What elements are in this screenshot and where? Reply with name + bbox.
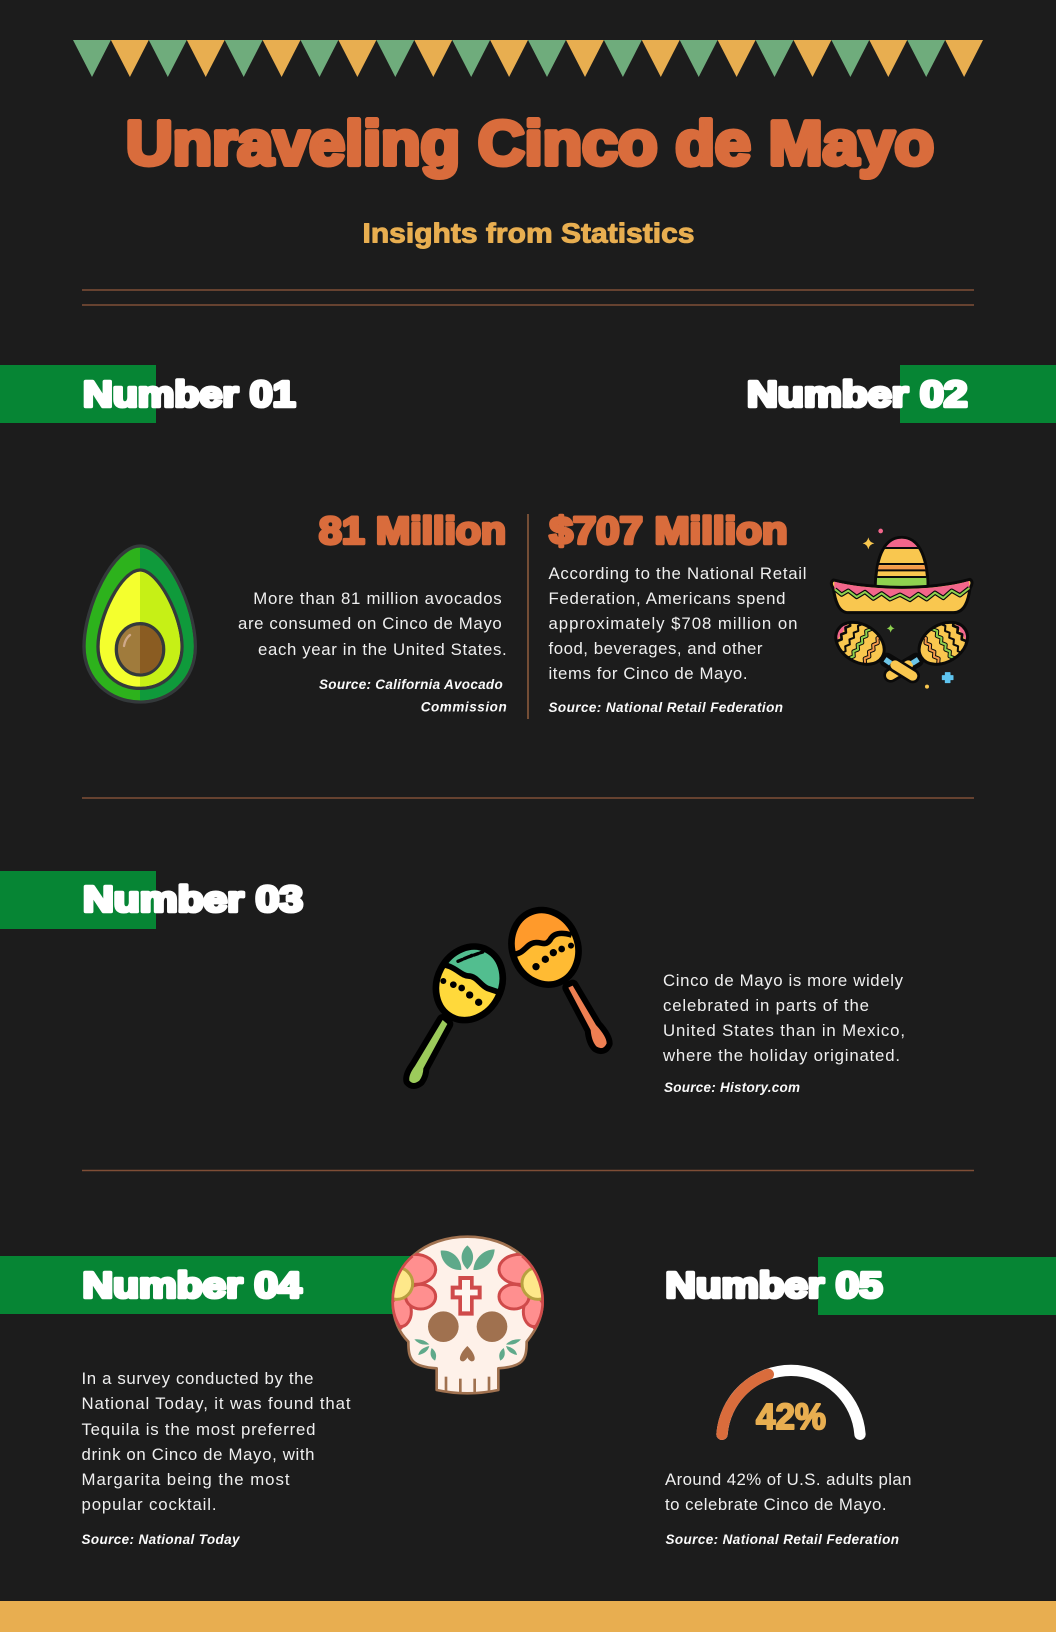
icon: avocado: [84, 546, 195, 702]
body text 05: [665, 1470, 912, 1514]
body text 04: popular cocktail.: [82, 1495, 216, 1514]
icon: sugar skull: [381, 1237, 554, 1393]
heading: number 03: Number 03: [83, 878, 303, 920]
footer bar: [0, 1601, 1056, 1632]
body text 02: food, beverages, and other: [548, 639, 763, 658]
title: Unraveling Cinco de Mayo: [126, 110, 934, 178]
center divider: [527, 514, 529, 719]
left maraca: [409, 927, 520, 1083]
flowers: [394, 1253, 542, 1328]
body text 05: Around 42% of U.S. adults plan: [665, 1470, 912, 1489]
nose: [460, 1346, 475, 1361]
stat: 81 million: 81 Million: [319, 510, 506, 552]
green bar 03: [0, 871, 156, 929]
section: number 04: [0, 1237, 554, 1547]
body text 01: [238, 589, 507, 659]
body text 04: drink on Cinco de Mayo, with: [82, 1445, 314, 1464]
sombrero: [831, 537, 972, 613]
body text 02: Federation, Americans spend: [548, 589, 786, 608]
gauge label: 42%: [756, 1396, 826, 1437]
heading: number 04: Number 04: [82, 1264, 302, 1306]
body text 02: According to the National Retail: [548, 564, 806, 583]
flower edge arcs: [393, 1256, 543, 1329]
gauge: 42 percent: [722, 1370, 860, 1434]
body text 04: Margarita being the most: [82, 1470, 290, 1489]
body text 01: each year in the United States.: [258, 640, 507, 659]
body text 04: Tequila is the most preferred: [82, 1420, 316, 1439]
section: number 05: [665, 1257, 1056, 1547]
section: number 03: [0, 871, 905, 1095]
green bar 01: [0, 365, 156, 423]
body text 03: where the holiday originated.: [662, 1046, 900, 1065]
green bar 02: [900, 365, 1056, 423]
heading: number 02: Number 02: [747, 374, 968, 414]
body text 03: Cinco de Mayo is more widely: [663, 971, 904, 990]
source 05: Source: National Retail Federation: [666, 1532, 899, 1547]
source 04: Source: National Today: [82, 1532, 241, 1547]
green bar 04: [0, 1256, 412, 1314]
divider: [82, 797, 974, 799]
cross: [451, 1276, 482, 1316]
icon: two maracas: [409, 900, 607, 1083]
section: number 02: [548, 365, 1056, 715]
source 01: Commission: [421, 700, 507, 714]
body text 02: approximately $708 million on: [548, 614, 798, 633]
body text 01: are consumed on Cinco de Mayo: [238, 614, 502, 633]
body text 04: [82, 1369, 351, 1514]
body text 03: celebrated in parts of the: [663, 996, 869, 1015]
crossed maracas: [834, 621, 969, 684]
body text 03: [662, 971, 905, 1065]
heading: number 01: Number 01: [83, 374, 296, 414]
body text 01: More than 81 million avocados: [253, 589, 502, 608]
body text 05: to celebrate Cinco de Mayo.: [665, 1495, 886, 1514]
stat: 707 million: $707 Million: [550, 510, 788, 552]
header rules: [82, 290, 974, 305]
icon: sombrero and maracas: [822, 529, 981, 689]
body text 02: [548, 564, 806, 683]
body text 02: items for Cinco de Mayo.: [548, 664, 748, 683]
bunting banner: [73, 40, 983, 77]
source 03: Source: History.com: [664, 1080, 800, 1095]
body text 04: National Today, it was found that: [82, 1394, 351, 1413]
body text 03: United States than in Mexico,: [663, 1021, 905, 1040]
cheek leaves: [414, 1339, 521, 1361]
sparkles: [863, 529, 953, 689]
right maraca: [500, 900, 607, 1048]
top leaves: [441, 1245, 495, 1270]
subtitle: Insights from Statistics: [362, 218, 694, 248]
teeth: [446, 1377, 489, 1392]
green bar 05: [818, 1257, 1056, 1315]
eyes: [428, 1311, 459, 1342]
section: number 01: [0, 365, 507, 714]
source 02: Source: National Retail Federation: [548, 700, 783, 715]
heading: number 05: Number 05: [666, 1264, 882, 1306]
source 01: [319, 677, 507, 714]
divider: [82, 1170, 974, 1172]
body text 04: In a survey conducted by the: [82, 1369, 314, 1388]
source 01: Source: California Avocado: [319, 677, 503, 692]
